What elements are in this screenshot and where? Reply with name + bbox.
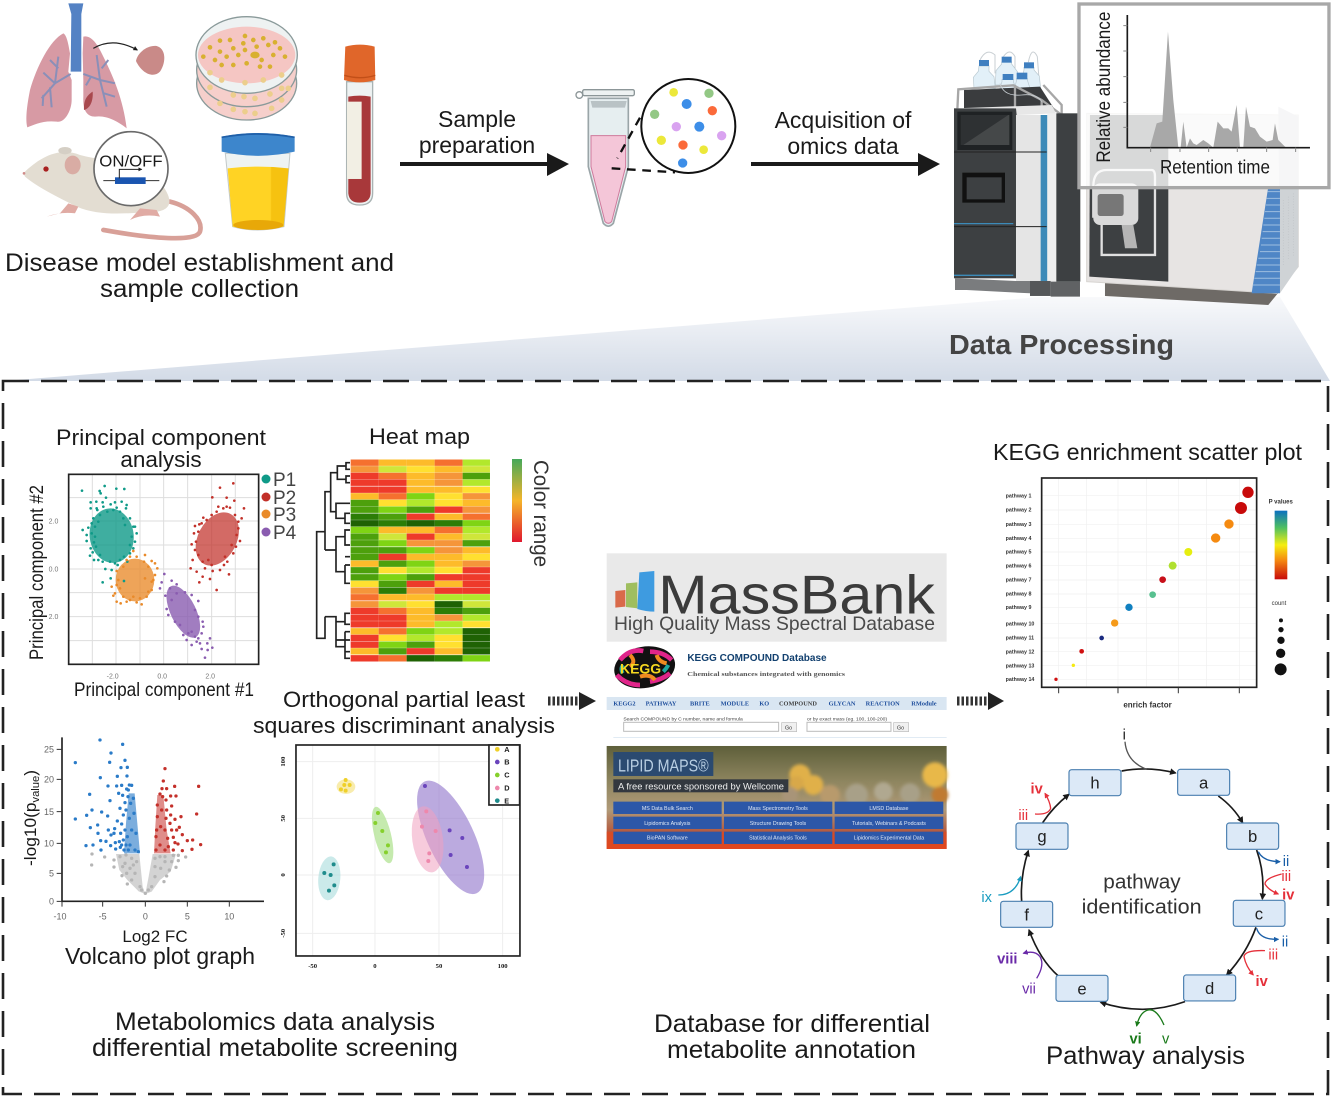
inset: chromatogram: Retention time xyxy=(1160,157,1270,178)
arrow: analysis to databases xyxy=(548,692,596,710)
chart: PCA scatter: 0.0 xyxy=(157,673,167,680)
heading: disease model: sample collection xyxy=(100,275,299,303)
label: acquisition of omics data: Acquisition of xyxy=(775,107,912,133)
branch labels: v xyxy=(1162,1031,1170,1047)
icon: urine sample cup xyxy=(222,133,295,230)
chart: volcano plot: 20 xyxy=(44,775,54,785)
OPLS legend: D xyxy=(504,784,510,793)
icon: lungs with tumour xyxy=(26,3,164,128)
KEGG nav bar: PATHWAY xyxy=(646,701,677,708)
heading: OPLS-DA: Orthogonal partial least xyxy=(283,687,526,712)
KEGG nav bar: GLYCAN xyxy=(829,701,856,708)
inset: chromatogram xyxy=(1079,4,1329,188)
KEGG nav bar: KO xyxy=(759,701,769,708)
chart: OPLS-DA score plot: 0 xyxy=(280,873,287,877)
enzyme boxes: h xyxy=(1090,774,1100,793)
OPLS legend: A xyxy=(504,745,510,754)
heading: metabolomics data analysis xyxy=(92,1008,458,1062)
heading: database annotation: metabolite annotation xyxy=(667,1036,916,1064)
axis label: -log10(p): ) xyxy=(21,770,40,776)
KEGG search form: or by exact mass (eg. 100, 100-200) xyxy=(807,717,887,723)
LIPID MAPS buttons: Tutorials, Webinars & Podcasts xyxy=(852,821,926,827)
legend: colour range: Color range xyxy=(529,460,552,567)
count legend xyxy=(1272,601,1287,675)
chart: KEGG enrichment scatter: pathway 1 xyxy=(1006,494,1031,500)
LIPID MAPS buttons: Lipidomics Analysis xyxy=(644,821,691,827)
legend: PCA groups: P1 xyxy=(273,470,296,491)
branch labels: iv xyxy=(1282,887,1295,903)
branch labels: iii xyxy=(1268,947,1278,963)
KEGG nav bar: KEGG2 xyxy=(613,701,635,708)
chart: KEGG enrichment scatter: enrich factor xyxy=(1123,700,1172,709)
legend: PCA groups xyxy=(262,470,297,544)
chart: PCA scatter: -2.0 xyxy=(107,673,119,680)
panel: KEGG COMPOUND database: KEGG COMPOUND Database xyxy=(687,653,827,664)
chart: KEGG enrichment scatter: pathway 7 xyxy=(1006,578,1031,584)
KEGG nav bar: BRITE xyxy=(690,701,710,708)
cycle arrows xyxy=(1021,742,1263,1009)
icon: KEGG logo xyxy=(611,642,678,693)
OPLS legend: E xyxy=(504,796,509,805)
axis label: -log10(p): value xyxy=(30,776,42,803)
KEGG nav bar: COMPOUND xyxy=(779,701,817,708)
label: acquisition of omics data: omics data xyxy=(787,133,899,159)
arrow: to LC-MS instrument xyxy=(751,153,940,176)
diagram: pathway cycle xyxy=(981,727,1295,1047)
legend: PCA groups: P4 xyxy=(273,523,297,544)
panel: MassBank logo xyxy=(607,553,947,642)
axis label: PC2: Principal component #2 xyxy=(26,485,48,660)
KEGG search form: Go xyxy=(897,725,904,731)
branch labels: vi xyxy=(1130,1031,1142,1047)
chart: KEGG enrichment scatter: pathway 14 xyxy=(1006,677,1034,683)
KEGG nav bar xyxy=(607,697,947,710)
LIPID MAPS buttons: Statistical Analysis Tools xyxy=(749,836,807,842)
KEGG search form: Go xyxy=(785,725,792,731)
chart: volcano plot: 25 xyxy=(44,745,54,755)
chart: volcano plot: 15 xyxy=(44,807,54,817)
branch labels: ix xyxy=(981,890,993,906)
heading: principal component analysis: Principal component xyxy=(56,425,267,450)
heading: metabolomics data analysis: differential metabolite screening xyxy=(92,1034,458,1062)
KEGG nav bar: RModule xyxy=(911,701,937,708)
branch labels: ii xyxy=(1282,935,1288,951)
LIPID MAPS buttons: LMSD Database xyxy=(869,806,909,812)
magnifier: ON/OFF: ON/OFF xyxy=(99,154,163,171)
OPLS legend: B xyxy=(504,758,510,767)
chart: PCA scatter: 2.0 xyxy=(49,518,58,525)
panel: MassBank logo: MassBank xyxy=(658,563,936,625)
dendrogram xyxy=(317,463,350,658)
icon: KEGG logo: KEGG xyxy=(620,660,661,676)
chart: volcano plot: -5 xyxy=(99,911,107,921)
chart: KEGG enrichment scatter: pathway 9 xyxy=(1006,605,1031,611)
chart: volcano plot: 10 xyxy=(224,911,234,921)
chart: PCA scatter: 0.0 xyxy=(49,566,58,573)
icon: sample tube with metabolites magnified xyxy=(576,79,735,226)
enzyme boxes xyxy=(1001,769,1285,1001)
heading: OPLS-DA: squares discriminant analysis xyxy=(253,713,555,738)
chart: OPLS-DA score plot: -50 xyxy=(308,963,318,970)
label: acquisition of omics data xyxy=(775,107,912,159)
axis label: -log10(p): -log10(p xyxy=(21,804,40,866)
heading: disease model xyxy=(5,249,394,303)
heading: principal component analysis: analysis xyxy=(120,447,202,472)
heading: data processing: Data Processing xyxy=(949,329,1174,360)
heading: database annotation xyxy=(654,1010,930,1064)
label: pathway identification: identification xyxy=(1082,895,1202,918)
legend: PCA groups: P2 xyxy=(273,488,296,509)
OPLS legend: C xyxy=(504,771,510,780)
branch labels: viii xyxy=(997,951,1018,967)
label: pathway identification xyxy=(1082,870,1202,918)
enzyme boxes: e xyxy=(1077,979,1087,998)
chart: KEGG enrichment scatter: pathway 11 xyxy=(1006,636,1034,642)
chart: OPLS-DA score plot xyxy=(280,745,520,970)
LIPID MAPS buttons: BioPAN Software xyxy=(647,836,688,842)
chart: OPLS-DA score plot: 50 xyxy=(280,814,287,822)
heading: principal component analysis xyxy=(56,425,267,472)
chart: volcano plot: -10 xyxy=(53,911,66,921)
heading: KEGG enrichment scatter plot: KEGG enrichment scatter plot xyxy=(993,439,1303,465)
heading: volcano plot graph: Volcano plot graph xyxy=(65,943,255,969)
heading: heat map: Heat map xyxy=(369,424,470,449)
LIPID MAPS buttons: MS Data Bulk Search xyxy=(642,806,693,812)
KEGG search form: Search COMPOUND by C number, name and formula xyxy=(623,717,743,723)
panel: LIPID MAPS: A free resource sponsored by Wellcome xyxy=(618,781,784,791)
chart: volcano plot: 5 xyxy=(49,869,54,879)
magnifier: ON/OFF xyxy=(94,132,168,206)
LIPID MAPS buttons: Lipidomics Experimental Data xyxy=(854,836,924,842)
chart: KEGG enrichment scatter: pathway 10 xyxy=(1006,621,1034,627)
heading: OPLS-DA xyxy=(253,687,555,738)
chart: PCA scatter xyxy=(49,474,259,680)
chart: volcano plot: 5 xyxy=(185,911,190,921)
chart: KEGG enrichment scatter: pathway 8 xyxy=(1006,592,1031,598)
chart: volcano plot xyxy=(44,737,264,921)
panel: LIPID MAPS xyxy=(607,746,948,849)
enzyme boxes: a xyxy=(1199,773,1209,792)
branch labels: iii xyxy=(1018,808,1028,824)
chart: KEGG enrichment scatter: pathway 13 xyxy=(1006,663,1034,669)
chart: KEGG enrichment scatter: pathway 5 xyxy=(1006,550,1031,556)
chart: volcano plot: 0 xyxy=(49,897,54,907)
chart: KEGG enrichment scatter: pathway 12 xyxy=(1006,649,1034,655)
chart: PCA scatter: 2.0 xyxy=(49,614,58,621)
chart: KEGG enrichment scatter: pathway 2 xyxy=(1006,508,1031,514)
enzyme boxes: g xyxy=(1037,827,1047,846)
chart: OPLS-DA score plot: 0 xyxy=(373,963,377,970)
legend: PCA groups: P3 xyxy=(273,505,296,526)
label: sample preparation: Sample xyxy=(438,106,516,132)
heading: metabolomics data analysis: Metabolomics data analysis xyxy=(115,1008,435,1036)
chart: KEGG enrichment scatter: pathway 6 xyxy=(1006,563,1031,569)
chart: OPLS-DA score plot: 100 xyxy=(498,963,508,970)
chart: volcano plot: 10 xyxy=(44,839,54,849)
icon: blood collection tube xyxy=(344,45,375,205)
enzyme boxes: b xyxy=(1248,827,1257,846)
chart: KEGG enrichment scatter: pathway 4 xyxy=(1006,536,1031,542)
arrow: databases to pathway results xyxy=(957,692,1004,710)
heading: disease model: Disease model establishment and xyxy=(5,249,394,277)
enzyme boxes: c xyxy=(1255,904,1263,923)
chart: OPLS-DA score plot: 50 xyxy=(436,963,443,970)
branch reactions xyxy=(998,793,1282,1026)
axis label: Log2 FC: Log2 FC xyxy=(122,927,188,946)
axis label: PC1: Principal component #1 xyxy=(74,679,254,701)
branch labels: iv xyxy=(1256,974,1269,990)
solvent bottles xyxy=(957,52,1062,115)
label: pathway identification: pathway xyxy=(1103,870,1181,893)
KEGG nav bar: REACTION xyxy=(866,701,900,708)
legend: colour range xyxy=(512,459,552,567)
label: sample preparation xyxy=(419,106,535,158)
branch labels: iv xyxy=(1031,781,1044,797)
chart: OPLS-DA score plot: -50 xyxy=(280,928,287,938)
P value legend: P values xyxy=(1269,499,1293,505)
icon: LC-MS instrument xyxy=(954,52,1298,305)
chart: heat map with dendrogram xyxy=(317,463,490,658)
panel: data processing dashed frame xyxy=(3,381,1328,1094)
arrow: to sample tube xyxy=(400,153,569,176)
branch labels: iii xyxy=(1281,869,1291,885)
panel: KEGG COMPOUND database: Chemical substances integrated with genomics xyxy=(687,671,845,678)
chart: volcano plot: 0 xyxy=(143,911,148,921)
LIPID MAPS buttons: Mass Spectrometry Tools xyxy=(748,806,808,812)
branch labels: i xyxy=(1123,727,1126,743)
panel: KEGG COMPOUND database xyxy=(607,642,947,737)
OPLS legend xyxy=(489,745,520,805)
heading: database annotation: Database for differential xyxy=(654,1010,930,1038)
chart: KEGG enrichment scatter: pathway 3 xyxy=(1006,522,1031,528)
KEGG search form xyxy=(613,717,947,737)
chart: OPLS-DA score plot: 100 xyxy=(280,756,287,767)
enzyme boxes: f xyxy=(1024,905,1029,924)
heading: pathway analysis: Pathway analysis xyxy=(1046,1042,1245,1070)
label: sample preparation: preparation xyxy=(419,132,535,158)
panel: LIPID MAPS: LIPID MAPS® xyxy=(618,756,709,776)
chart: PCA scatter: 2.0 xyxy=(205,673,215,680)
count legend: count xyxy=(1272,601,1287,607)
branch labels xyxy=(981,727,1295,1047)
branch labels: ii xyxy=(1283,854,1289,870)
enzyme boxes: d xyxy=(1205,979,1214,998)
LIPID MAPS buttons xyxy=(613,802,943,844)
icon: stacked petri dishes xyxy=(196,17,297,120)
branch labels: vii xyxy=(1022,981,1036,997)
icon: mouse with ON/OFF gene switch xyxy=(23,132,200,238)
chart: KEGG enrichment scatter xyxy=(1006,478,1293,709)
zoom band connecting instrument to data processing box xyxy=(5,297,1330,381)
panel: MassBank logo: High Quality Mass Spectral Database xyxy=(614,614,935,635)
P value legend xyxy=(1269,499,1293,579)
KEGG nav bar: MODULE xyxy=(721,701,749,708)
LIPID MAPS buttons: Structure Drawing Tools xyxy=(750,821,807,827)
